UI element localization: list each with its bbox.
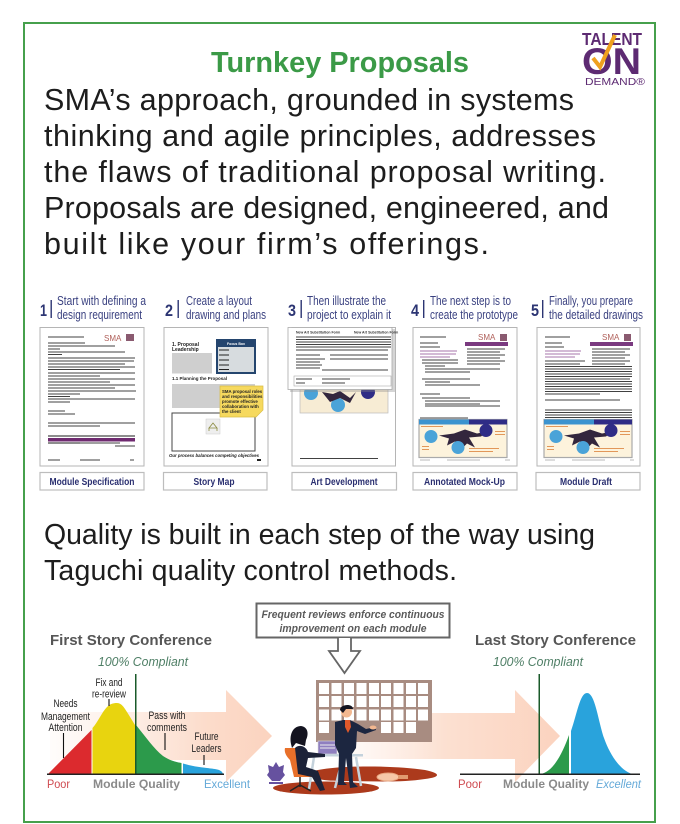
step 5 caption: 5 <box>531 301 539 320</box>
document: art development <box>288 328 398 466</box>
first story conference heading: First Story Conference <box>50 632 212 649</box>
callout: frequent reviews: Frequent reviews enforce continuous <box>262 609 444 621</box>
first axis labels <box>47 777 251 791</box>
document: story map: the client <box>222 409 241 414</box>
document: art development: New Art Substitution Form <box>296 330 340 334</box>
illustration: floor shapes <box>273 766 437 794</box>
step 3 caption <box>288 294 391 322</box>
callout: frequent reviews: improvement on each module <box>280 623 426 635</box>
step 5 caption: the detailed drawings <box>549 308 643 322</box>
step 3 caption: Then illustrate the <box>307 294 386 308</box>
intro paragraph: the flaws of traditional proposal writing. <box>44 155 606 189</box>
first axis labels: Poor <box>47 777 70 791</box>
step 3 caption: 3 <box>288 301 296 320</box>
quality statement: Taguchi quality control methods. <box>44 555 457 587</box>
arrow: right improvement arrow <box>330 690 560 782</box>
document: module draft: SMA <box>602 333 620 342</box>
step 4 caption: The next step is to <box>430 294 511 308</box>
curve labels: Management <box>41 711 90 723</box>
label: Module Draft <box>536 472 640 490</box>
intro paragraph: built like your firm’s offerings. <box>44 227 489 261</box>
step 1 caption: 1 <box>40 301 47 320</box>
chart: last distribution curve <box>460 674 640 775</box>
intro paragraph: SMA’s approach, grounded in systems <box>44 83 574 117</box>
curve labels: re-review <box>92 688 126 700</box>
label: Art Development: Art Development <box>310 476 378 488</box>
step 4 caption: create the prototype <box>430 308 518 322</box>
label: Module Draft: Module Draft <box>560 476 612 488</box>
document: story map <box>164 328 268 466</box>
step 2 caption: drawing and plans <box>186 308 266 322</box>
document: annotated mock-up <box>413 328 517 466</box>
intro paragraph <box>44 83 609 261</box>
last story conference heading: Last Story Conference <box>475 632 636 649</box>
document: module specification: SMA <box>104 334 122 343</box>
document: story map: Leadership <box>172 347 199 353</box>
first axis labels: Module Quality <box>93 777 180 791</box>
document: annotated mock-up: SMA <box>478 333 496 342</box>
illustration: standing presenter <box>335 705 376 788</box>
curve labels: Pass with <box>148 710 186 722</box>
curve labels: Attention <box>48 722 82 734</box>
quality statement <box>44 519 595 587</box>
arrow: left improvement arrow <box>50 690 272 782</box>
last axis labels <box>458 777 642 791</box>
intro paragraph: Proposals are designed, engineered, and <box>44 191 609 225</box>
illustration: desk and laptop <box>308 741 363 789</box>
curve labels <box>41 677 222 755</box>
step 2 caption: Create a layout <box>186 294 252 308</box>
last axis labels: Excellent <box>596 777 642 791</box>
document: module specification <box>40 328 144 466</box>
illustration: kanban board <box>316 680 432 742</box>
curve labels: Leaders <box>192 743 222 755</box>
label: Story Map: Story Map <box>194 476 234 488</box>
intro paragraph: thinking and agile principles, addresses <box>44 119 596 153</box>
logo: Talent on Demand: DEMAND® <box>585 76 645 88</box>
logo: Talent on Demand: ON <box>582 41 641 82</box>
illustration: plant <box>267 762 285 784</box>
curve labels: Fix and <box>96 677 122 689</box>
last axis labels: Module Quality <box>503 777 589 791</box>
quality statement: Quality is built in each step of the way using <box>44 519 595 551</box>
document: art development: New Art Substitution Form <box>354 330 398 334</box>
title: Turnkey Proposals <box>211 47 469 79</box>
chart: first distribution curve <box>47 674 224 775</box>
first compliance label: 100% Compliant <box>98 655 189 669</box>
label: Art Development <box>292 472 396 490</box>
step 5 caption: Finally, you prepare <box>549 294 633 308</box>
step 5 caption <box>531 294 643 322</box>
curve labels: comments <box>147 722 187 734</box>
document: story map: 1. Proposal <box>172 342 200 348</box>
step 1 caption <box>40 294 146 322</box>
document: story map: and responsibilities <box>222 394 263 399</box>
first axis labels: Excellent <box>204 777 251 791</box>
document: story map: collaboration with <box>222 404 259 409</box>
step 2 caption <box>165 294 266 322</box>
label: Story Map <box>164 472 267 490</box>
step 4 caption <box>411 294 518 322</box>
document: story map: 1.1 Planning the Proposal <box>172 376 227 381</box>
document: story map: promote effective <box>222 399 258 404</box>
label: Annotated Mock-Up: Annotated Mock-Up <box>424 476 505 488</box>
step 4 caption: 4 <box>411 301 419 320</box>
step 1 caption: Start with defining a <box>57 294 146 308</box>
illustration: seated woman on chair <box>285 726 325 791</box>
curve labels: Future <box>194 731 218 743</box>
curve labels: Needs <box>54 698 78 710</box>
last axis labels: Poor <box>458 777 482 791</box>
step 1 caption: design requirement <box>57 308 142 322</box>
logo: Talent on Demand: TALENT <box>582 29 642 49</box>
document: module draft <box>537 328 640 466</box>
callout: frequent reviews <box>256 604 450 638</box>
arrow: callout pointer <box>329 638 360 673</box>
document: story map: Focus Box <box>227 342 245 346</box>
step 2 caption: 2 <box>165 301 173 320</box>
label: Module Specification: Module Specification <box>50 476 134 488</box>
document: story map: Our process balances competing objectives <box>169 453 260 458</box>
label: Module Specification <box>40 472 144 490</box>
step 3 caption: project to explain it <box>307 308 391 322</box>
label: Annotated Mock-Up <box>413 472 517 490</box>
logo: Talent on Demand <box>582 29 645 88</box>
last compliance label: 100% Compliant <box>493 655 584 669</box>
document: story map: SMA proposal roles <box>222 389 263 394</box>
